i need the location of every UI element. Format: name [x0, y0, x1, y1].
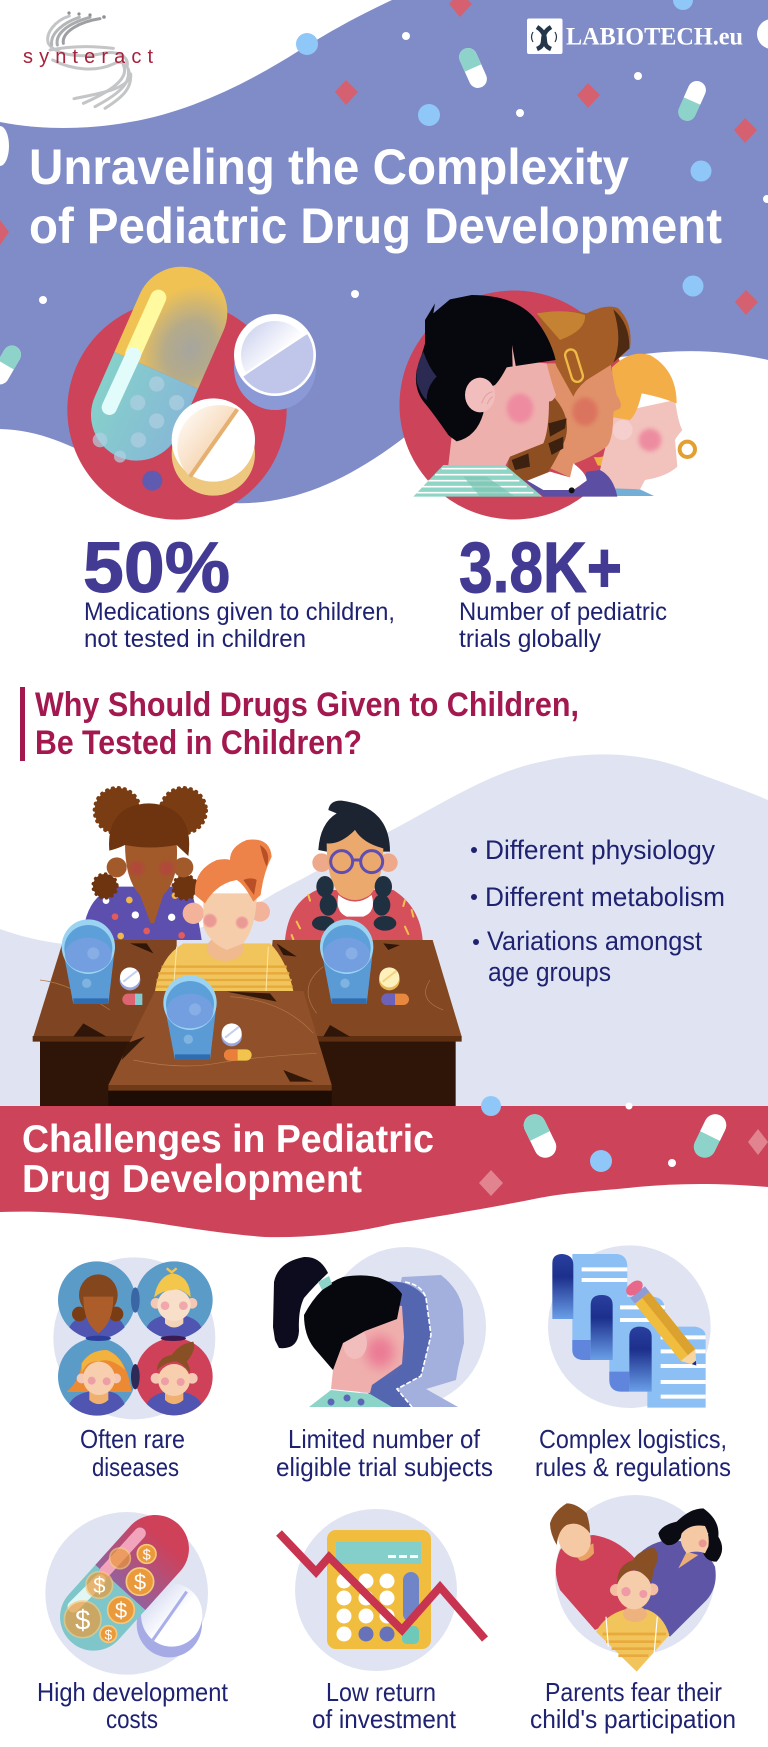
challenge: complex logistics [548, 1245, 711, 1408]
illustration: children at desks [33, 788, 462, 1106]
challenge: high development costs: $ [93, 1573, 105, 1598]
child [596, 1547, 669, 1672]
father [550, 1503, 596, 1562]
label: parents fear participation: child's participation [530, 1704, 736, 1734]
blue tablet [234, 314, 316, 410]
silhouettes [370, 1275, 464, 1407]
front girl [413, 295, 556, 497]
girl with glasses [285, 801, 423, 940]
challenge: high development costs: $ [134, 1570, 146, 1595]
label: low return of investment [312, 1677, 457, 1734]
scroll sheets [562, 1254, 706, 1408]
stat: 50%: Medications given to children, [84, 598, 395, 626]
logo: synteract: synteract [23, 46, 153, 68]
baby [592, 354, 695, 496]
challenge: high development costs [45, 1501, 208, 1675]
label: low return of investment: Low return [326, 1677, 436, 1707]
water glasses [62, 919, 373, 1060]
label: complex logistics: rules & regulations [535, 1452, 731, 1482]
portrait 4 [135, 1338, 213, 1415]
label: parents fear participation [530, 1677, 736, 1734]
calculator [327, 1530, 431, 1649]
small purple dot [142, 471, 162, 491]
heading: why test in children: Why Should Drugs Given to Children, [35, 686, 579, 724]
pencil [624, 1278, 704, 1371]
label: parents fear participation: Parents fear their [545, 1677, 722, 1707]
coins [64, 1545, 156, 1642]
red circle backdrop [400, 290, 628, 520]
cream tablet [172, 398, 255, 496]
front desk [108, 991, 332, 1106]
heart [556, 1535, 637, 1630]
tablets and small capsules on desks [120, 967, 409, 1061]
heading: why test in children [20, 686, 579, 762]
challenge: often rare diseases [53, 1257, 215, 1419]
mother [658, 1508, 722, 1568]
stat: 3.8K+: Number of pediatric [459, 598, 667, 626]
bullet list: reasons: age groups [488, 957, 611, 987]
challenge: high development costs: $ [115, 1598, 127, 1623]
bullet list: reasons: Different metabolism [485, 882, 725, 912]
logo: LABIOTECH.eu [527, 18, 743, 54]
logo: synteract [23, 11, 153, 108]
label: high development costs: costs [106, 1704, 158, 1734]
bullet list: reasons: Variations amongst [487, 926, 702, 956]
teal polka top [309, 1390, 392, 1407]
banner heading: Drug Development [22, 1158, 362, 1201]
stat: 3.8K+ [459, 529, 667, 653]
logo: LABIOTECH.eu: LABIOTECH.eu [566, 24, 743, 50]
girl with buns [85, 788, 206, 940]
capsule [46, 1501, 203, 1665]
bullet list: reasons: Different physiology [485, 835, 715, 865]
label: low return of investment: of investment [312, 1704, 457, 1734]
challenge: high development costs: $ [143, 1547, 151, 1563]
red circle backdrop [67, 300, 287, 520]
white tablet [137, 1591, 202, 1657]
illustration: three children in profile [400, 290, 695, 520]
title: of Pediatric Drug Development [29, 198, 722, 254]
stat: 50%: 50% [83, 529, 230, 608]
challenge: parents fear participation [550, 1495, 722, 1672]
label: limited eligible subjects: Limited number of [288, 1424, 481, 1454]
label: often rare diseases [80, 1424, 185, 1482]
girl skin [331, 1300, 404, 1393]
stat: 3.8K+: 3.8K+ [459, 529, 622, 608]
label: high development costs: High development [37, 1677, 229, 1707]
challenge: high development costs: $ [104, 1626, 112, 1642]
falling red arrow line [279, 1533, 485, 1639]
label: high development costs [37, 1677, 229, 1734]
banner confetti [479, 1096, 768, 1196]
confetti: decorative pills, dots and diamonds [0, 0, 768, 388]
banner heading: Challenges in Pediatric [22, 1118, 434, 1161]
banner heading [22, 1118, 434, 1201]
stat: 3.8K+: trials globally [459, 625, 601, 653]
title [29, 139, 722, 254]
challenge: limited eligible subjects [273, 1247, 486, 1407]
label: limited eligible subjects: eligible trial subjects [276, 1452, 493, 1482]
heading: why test in children: Be Tested in Children? [35, 724, 362, 762]
label: often rare diseases: diseases [92, 1452, 179, 1482]
stat: 50% [83, 529, 395, 653]
boy with orange hair [155, 840, 293, 991]
label: complex logistics [535, 1424, 731, 1482]
stat: 50%: not tested in children [84, 625, 306, 653]
challenge: high development costs: $ [75, 1604, 90, 1635]
challenges banner [0, 1096, 768, 1237]
back desks [33, 940, 462, 1106]
title: Unraveling the Complexity [29, 139, 629, 195]
label: often rare diseases: Often rare [80, 1424, 185, 1454]
header background wave [0, 0, 768, 503]
older girl [508, 307, 631, 497]
illustration: capsule and tablets [67, 252, 316, 520]
portrait 1 [58, 1261, 135, 1339]
black hair and ponytail [304, 1275, 402, 1370]
label: complex logistics: Complex logistics, [539, 1424, 727, 1454]
portrait 2 [135, 1261, 213, 1339]
bullet list: reasons [471, 835, 725, 987]
portrait 3 [58, 1338, 135, 1416]
capsule [76, 252, 242, 475]
challenge: low return of investment [279, 1509, 485, 1671]
label: limited eligible subjects [276, 1424, 493, 1482]
lavender hill background [0, 754, 768, 1107]
